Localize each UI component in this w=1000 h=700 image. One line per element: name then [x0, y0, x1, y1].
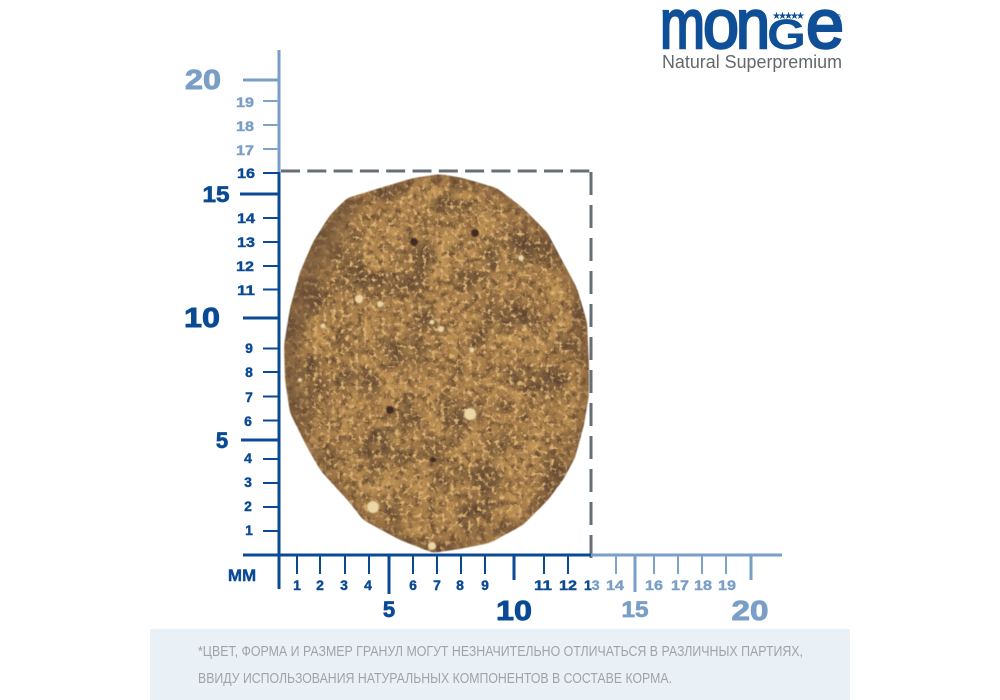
- vertical axis labels: 2: [244, 498, 252, 514]
- vertical axis labels: 10: [184, 302, 220, 333]
- logo: Monge Natural Superpremium: ®: [837, 13, 841, 20]
- horizontal axis labels: [228, 566, 768, 626]
- vertical axis labels: 4: [244, 450, 252, 466]
- dashed size guide: [281, 171, 591, 566]
- horizontal axis labels: 19: [718, 577, 736, 593]
- horizontal axis labels: 7: [433, 577, 441, 593]
- horizontal axis labels: 13: [584, 577, 600, 593]
- horizontal axis labels: 17: [671, 577, 689, 593]
- logo: Monge Natural Superpremium: G: [767, 11, 806, 59]
- horizontal axis labels: 20: [732, 595, 768, 626]
- horizontal axis labels: 5: [383, 597, 395, 622]
- horizontal axis labels: 9: [481, 577, 489, 593]
- vertical axis labels: 5: [216, 428, 228, 453]
- vertical axis labels: 12: [236, 258, 254, 274]
- vertical axis labels: [184, 64, 255, 538]
- vertical axis labels: 18: [236, 118, 254, 134]
- vertical axis labels: 20: [185, 64, 221, 95]
- vertical axis labels: 3: [244, 474, 252, 490]
- footer note text: *ЦВЕТ, ФОРМА И РАЗМЕР ГРАНУЛ МОГУТ НЕЗНАЧИТЕЛЬНО ОТЛИЧАТЬСЯ В РАЗЛИЧНЫХ ПАРТИЯХ,: [198, 644, 803, 660]
- vertical axis labels: 16: [237, 165, 255, 181]
- horizontal axis labels: 14: [606, 577, 624, 593]
- footer note panel: [150, 629, 850, 700]
- horizontal axis labels: 16: [645, 577, 663, 593]
- horizontal axis labels: 1: [293, 577, 301, 593]
- logo: Monge Natural Superpremium: ★★★★★: [772, 11, 805, 22]
- vertical axis labels: 13: [237, 234, 255, 250]
- vertical axis labels: 14: [237, 210, 255, 226]
- vertical axis labels: 9: [245, 340, 253, 356]
- logo: Monge Natural Superpremium: Natural Superpremium: [662, 52, 842, 72]
- vertical axis labels: 15: [202, 182, 230, 207]
- footer note text: [198, 644, 803, 687]
- vertical axis labels: 6: [244, 413, 252, 429]
- horizontal axis labels: 15: [622, 597, 648, 622]
- vertical axis labels: 19: [236, 94, 254, 110]
- vertical axis labels: 17: [236, 142, 254, 158]
- vertical axis labels: 8: [245, 364, 253, 380]
- vertical axis labels: 1: [245, 522, 253, 538]
- horizontal axis labels: ММ: [228, 566, 256, 585]
- vertical axis labels: 11: [237, 282, 255, 298]
- vertical axis labels: 7: [245, 389, 253, 405]
- horizontal axis labels: 18: [694, 577, 712, 593]
- horizontal axis labels: 10: [496, 595, 532, 626]
- horizontal axis labels: 4: [364, 577, 372, 593]
- horizontal axis labels: 3: [340, 577, 348, 593]
- footer note text: ВВИДУ ИСПОЛЬЗОВАНИЯ НАТУРАЛЬНЫХ КОМПОНЕНТОВ В СОСТАВЕ КОРМА.: [198, 671, 672, 687]
- vertical axis: [240, 50, 279, 589]
- horizontal axis labels: 6: [409, 577, 417, 593]
- horizontal axis labels: 8: [456, 577, 464, 593]
- horizontal axis: [243, 555, 782, 594]
- kibble photo: [280, 170, 595, 560]
- horizontal axis labels: 11: [534, 577, 552, 593]
- horizontal axis labels: 2: [316, 577, 324, 593]
- logo: Monge Natural Superpremium: [660, 0, 844, 72]
- horizontal axis labels: 12: [559, 577, 577, 593]
